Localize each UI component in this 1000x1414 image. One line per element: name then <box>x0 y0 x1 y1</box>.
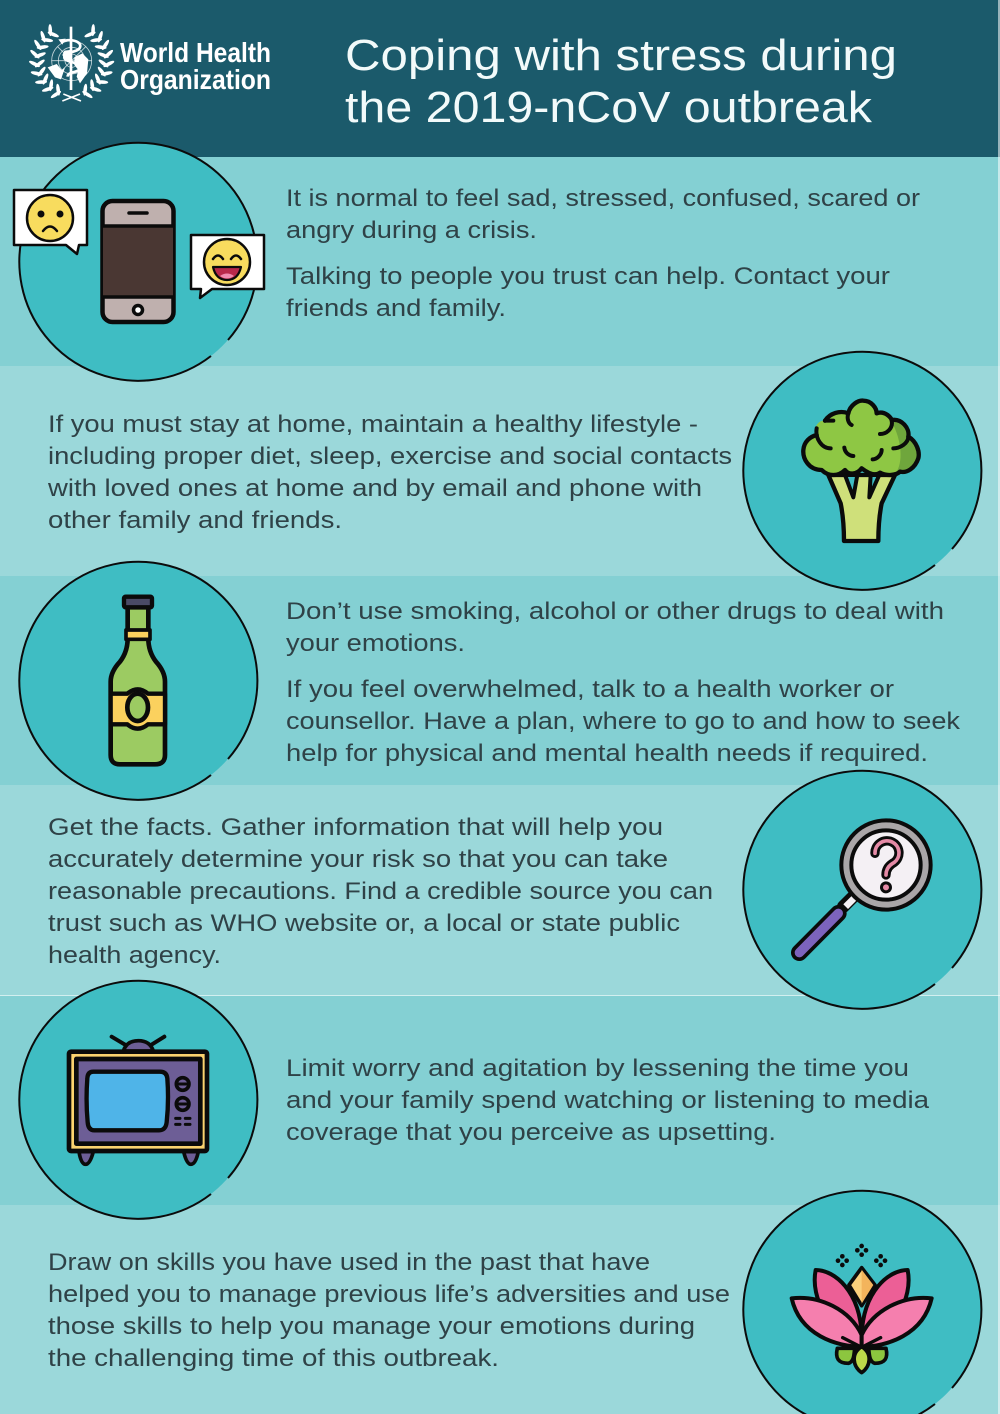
text block: Limit worry and agitation by lessening the time you <box>286 1055 909 1082</box>
panel: band 4 background <box>0 785 1000 995</box>
title: the 2019-nCoV outbreak <box>345 83 873 132</box>
icon: sad face speech bubble <box>14 190 87 254</box>
emblem <box>28 24 115 101</box>
text block: Don’t use smoking, alcohol or other drugs to deal with <box>286 598 944 625</box>
text block: counsellor. Have a plan, where to go to and how to seek <box>286 708 961 735</box>
icon: lotus flower <box>792 1244 932 1373</box>
panel: band 3 background <box>0 576 1000 785</box>
icon: broccoli <box>803 401 919 541</box>
icon: phone <box>102 201 174 322</box>
text block: helped you to manage previous life’s adversities and use <box>48 1281 730 1308</box>
text block: If you feel overwhelmed, talk to a health worker or <box>286 676 894 703</box>
text block: Draw on skills you have used in the past that have <box>48 1249 650 1276</box>
icon: happy face speech bubble <box>191 235 264 298</box>
panel: band 2 background <box>0 366 1000 576</box>
text block: reasonable precautions. Find a credible source you can <box>48 878 713 905</box>
organization name: World Health <box>120 37 271 68</box>
text block: help for physical and mental health needs if required. <box>286 740 928 767</box>
icon: television <box>69 1037 207 1164</box>
header <box>0 0 1000 157</box>
icon circle <box>19 562 257 800</box>
panel: draw on past skills <box>48 1191 981 1414</box>
title: Coping with stress during <box>345 31 897 80</box>
text block: with loved ones at home and by email and phone with <box>47 475 702 502</box>
text block: and your family spend watching or listening to media <box>286 1087 930 1114</box>
icon: magnifying glass with question mark <box>799 820 931 953</box>
panel: band 6 background <box>0 1205 1000 1414</box>
panel: limit media <box>19 981 936 1219</box>
text block: your emotions. <box>286 630 465 657</box>
WHO logo <box>28 24 271 101</box>
text block: friends and family. <box>286 295 506 322</box>
text block: including proper diet, sleep, exercise and social contacts <box>48 443 732 470</box>
panel: talk to people <box>14 143 927 381</box>
panel: band 1 background <box>0 157 1000 366</box>
text block: other family and friends. <box>48 507 342 534</box>
icon circle <box>743 771 981 1009</box>
panel: healthy lifestyle <box>47 352 981 590</box>
text block: the challenging time of this outbreak. <box>48 1345 499 1372</box>
text block: coverage that you perceive as upsetting. <box>286 1119 776 1146</box>
icon circle <box>19 981 257 1219</box>
text block: If you must stay at home, maintain a healthy lifestyle - <box>48 411 698 438</box>
icon circle <box>743 352 981 590</box>
icon: bottle <box>111 597 165 764</box>
panel: get the facts <box>48 771 981 1009</box>
text block: It is normal to feel sad, stressed, confused, scared or <box>286 185 920 212</box>
text block: those skills to help you manage your emotions during <box>48 1313 695 1340</box>
icon circle <box>19 143 257 381</box>
icon circle <box>743 1191 981 1414</box>
text block: accurately determine your risk so that you can take <box>48 846 668 873</box>
text block: Get the facts. Gather information that will help you <box>48 814 663 841</box>
text block: angry during a crisis. <box>286 217 537 244</box>
text block: trust such as WHO website or, a local or state public <box>48 910 680 937</box>
text block: Talking to people you trust can help. Contact your <box>286 263 890 290</box>
organization name: Organization <box>120 64 271 95</box>
panel: band 5 background <box>0 995 1000 1205</box>
panel: avoid smoking alcohol drugs <box>19 562 967 800</box>
text block: health agency. <box>48 942 221 969</box>
